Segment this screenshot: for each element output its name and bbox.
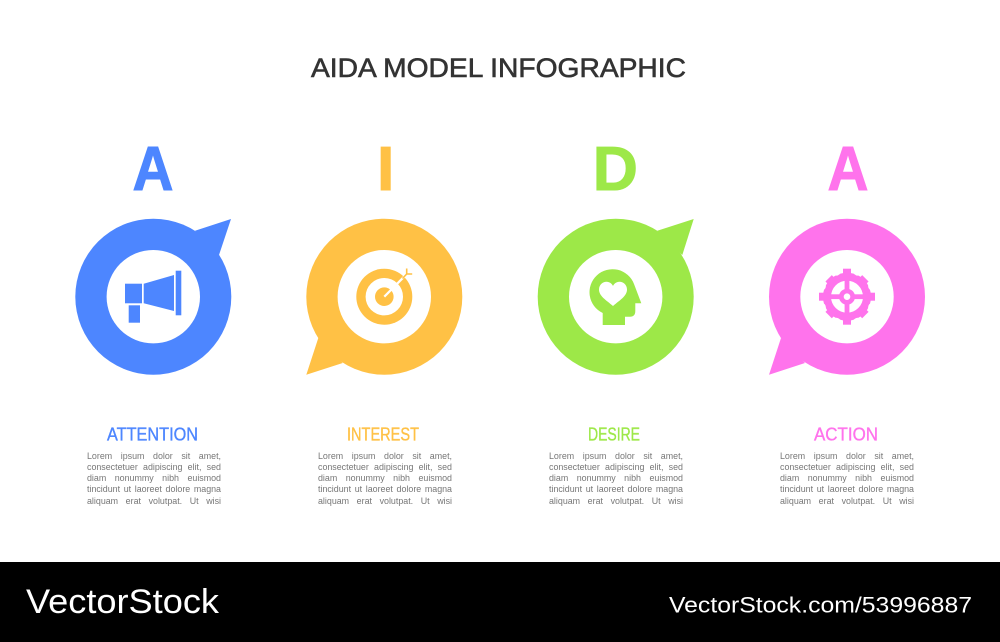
text block: interest [318, 451, 452, 506]
text block: action: tincidunt ut laoreet dolore magna [780, 484, 914, 494]
text block: action: aliquam erat volutpat. Ut wisi [780, 496, 914, 506]
text block: desire: aliquam erat volutpat. Ut wisi [549, 496, 683, 506]
heading: attention: ATTENTION [107, 424, 198, 444]
text block: interest: Lorem ipsum dolor sit amet, [318, 451, 452, 461]
panel: interest [306, 134, 462, 506]
icon: target with dart [356, 268, 412, 325]
text block: attention: diam nonummy nibh euismod [87, 473, 221, 483]
text block: interest: tincidunt ut laoreet dolore magna [318, 484, 452, 494]
panel: action [769, 134, 925, 506]
text block: desire [549, 451, 683, 506]
letter D: D [593, 134, 638, 204]
icon: megaphone [125, 271, 181, 323]
text block: action: diam nonummy nibh euismod [780, 473, 914, 483]
text block: interest: aliquam erat volutpat. Ut wisi [318, 496, 452, 506]
letter A: A [132, 134, 174, 204]
speech bubble [769, 219, 925, 375]
icon: gear [817, 266, 877, 327]
panel: attention [75, 134, 232, 506]
title: AIDA MODEL INFOGRAPHIC [311, 53, 686, 83]
speech bubble [306, 219, 462, 375]
text block: attention: tincidunt ut laoreet dolore magna [87, 484, 221, 494]
image id text: VectorStock.com/53996887 [669, 593, 972, 618]
text block: desire: diam nonummy nibh euismod [549, 473, 683, 483]
letter A: A [828, 134, 868, 204]
icon: head with heart [590, 269, 641, 325]
text block: desire: tincidunt ut laoreet dolore magna [549, 484, 683, 494]
text block: attention: Lorem ipsum dolor sit amet, [87, 451, 221, 461]
text block: attention: aliquam erat volutpat. Ut wisi [87, 496, 221, 506]
letter I: I [377, 134, 394, 204]
text block: action: consectetuer adipiscing elit, sed [780, 462, 914, 472]
logo text: VectorStock [26, 583, 220, 621]
heading: action: ACTION [814, 424, 878, 444]
text block: desire: Lorem ipsum dolor sit amet, [549, 451, 683, 461]
heading: interest: INTEREST [347, 424, 419, 444]
text block: attention: consectetuer adipiscing elit, sed [87, 462, 221, 472]
heading: desire: DESIRE [588, 424, 640, 444]
speech bubble [75, 219, 231, 375]
text block: action [780, 451, 914, 506]
text block: action: Lorem ipsum dolor sit amet, [780, 451, 914, 461]
text block: desire: consectetuer adipiscing elit, sed [549, 462, 683, 472]
watermark footer bar [0, 562, 1000, 642]
speech bubble [538, 219, 694, 375]
text block: attention [87, 451, 221, 506]
panel: desire [538, 134, 694, 506]
text block: interest: consectetuer adipiscing elit, sed [318, 462, 452, 472]
text block: interest: diam nonummy nibh euismod [318, 473, 452, 483]
